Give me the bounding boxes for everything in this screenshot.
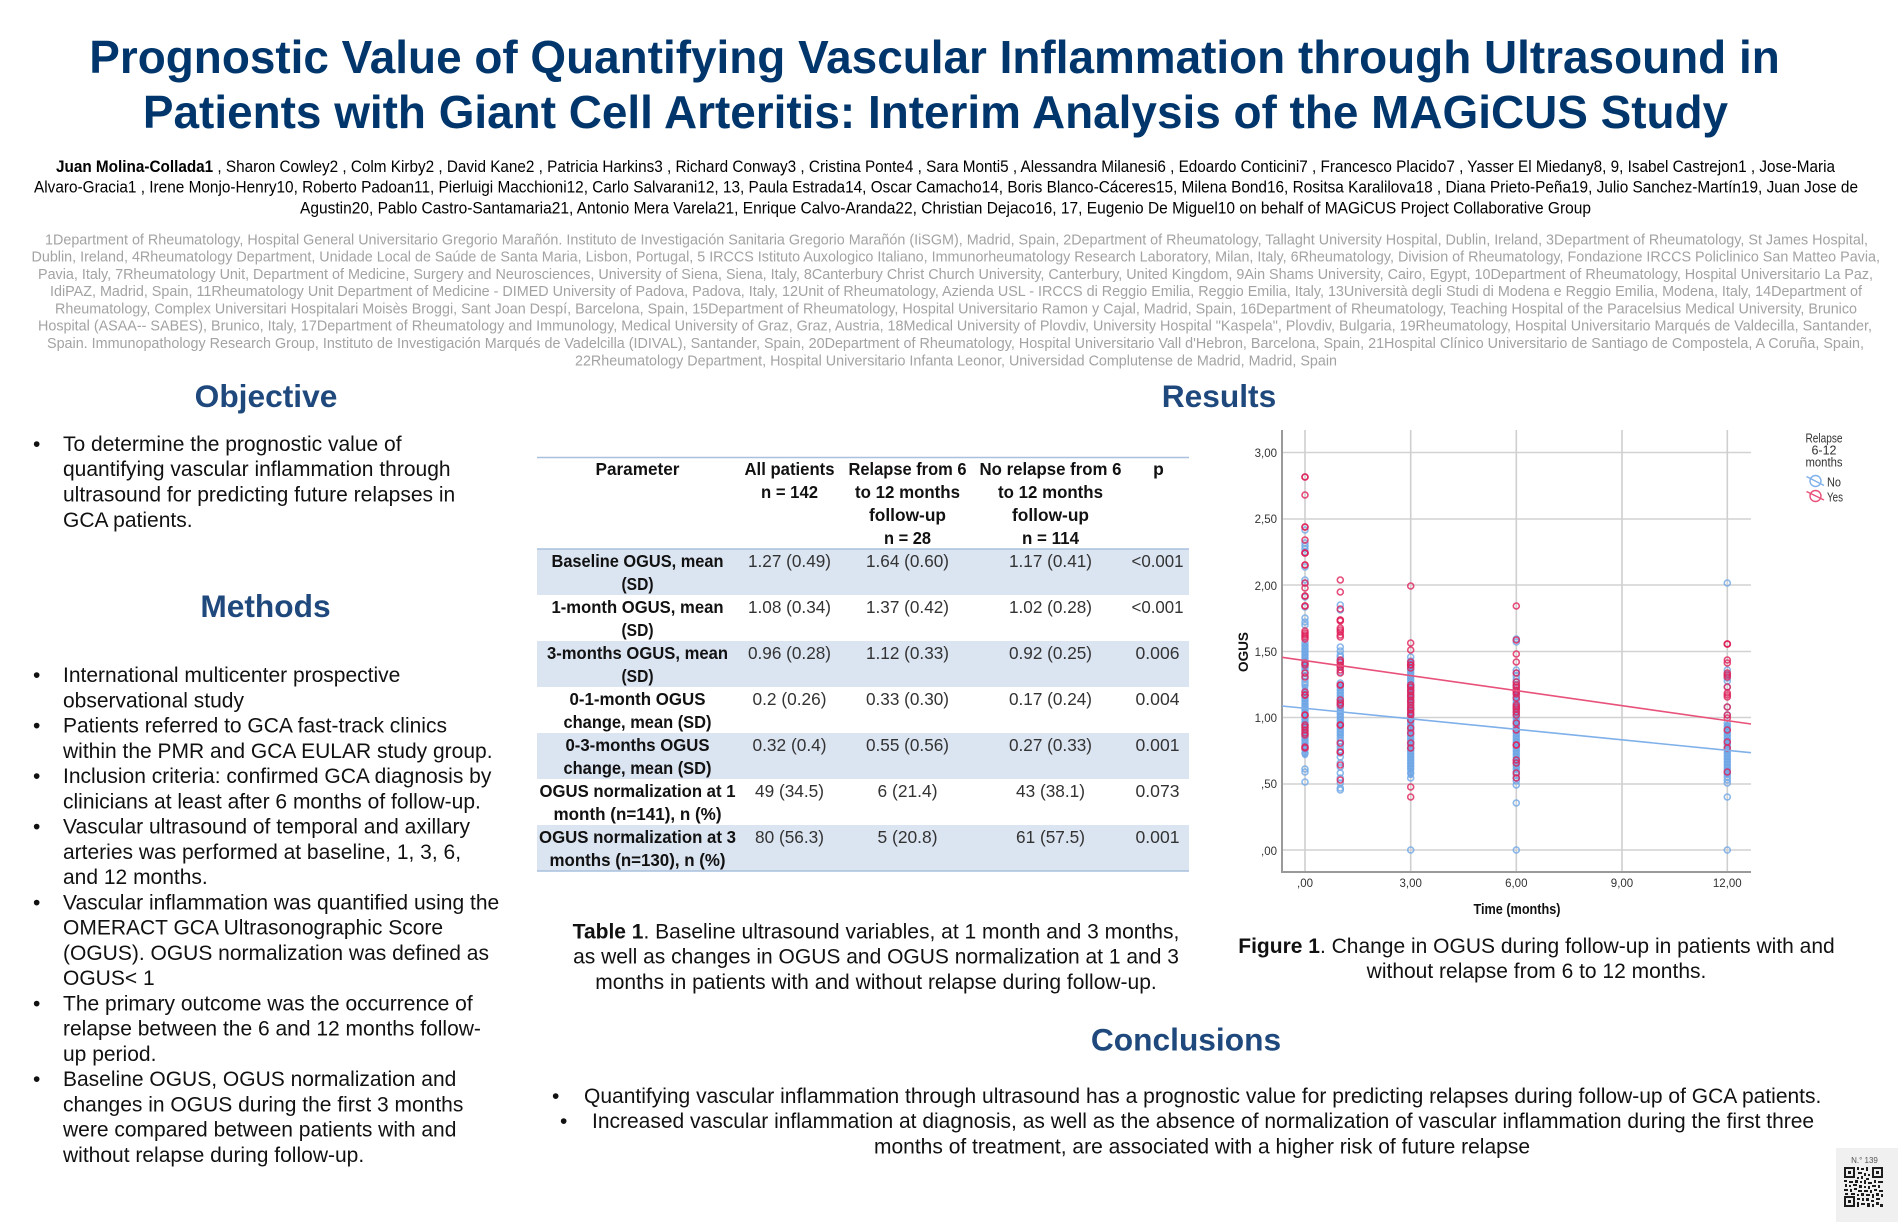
heading: objective: Objective <box>195 378 337 414</box>
panel: methods <box>33 588 499 1167</box>
chart legend: Relapse <box>1806 432 1843 446</box>
x axis tick labels: 3,00 <box>1400 878 1422 890</box>
methods list: • <box>33 714 40 738</box>
affiliations: Hospital (ASAA-- SABES), Brunico, Italy, 17Department of Rheumatology and Immunology, Medical University of Graz, Graz, Austria, 18Medical University of Plovdiv, University Hospital "Kaspela", Plovdiv, Bulgaria, 19Rheumatology, Hospital Universitario Marqués de Valdecilla, Santander, <box>38 318 1872 335</box>
row: baseline OGUS: 1.27 (0.49) <box>748 551 831 571</box>
row: 0-1-month OGUS change: 0.17 (0.24) <box>1009 689 1092 709</box>
row: baseline OGUS: 1.64 (0.60) <box>866 551 949 571</box>
red markers: relapse <box>1305 477 1727 797</box>
row: OGUS normalization 1 month: OGUS normalization at 1 <box>540 781 736 801</box>
row: OGUS normalization 3 months: 61 (57.5) <box>1016 827 1085 847</box>
methods list: Inclusion criteria: confirmed GCA diagnosis by <box>63 765 492 788</box>
table caption: as well as changes in OGUS and OGUS normalization at 1 and 3 <box>573 946 1179 969</box>
objective text: quantifying vascular inflammation through <box>63 458 451 481</box>
row: 0-3-months OGUS change: 0.27 (0.33) <box>1009 735 1092 755</box>
methods list: OGUS< 1 <box>63 967 155 990</box>
methods list: observational study <box>63 689 244 712</box>
objective text: • <box>33 433 40 456</box>
table row shading <box>537 549 1189 871</box>
y axis tick labels: 3,00 <box>1255 448 1277 460</box>
methods list: OMERACT GCA Ultrasonographic Score <box>63 916 443 940</box>
row: 0-1-month OGUS change: 0.33 (0.30) <box>866 689 949 709</box>
table header: to 12 months <box>855 482 960 502</box>
table caption: months in patients with and without relapse during follow-up. <box>595 971 1157 994</box>
row: 1-month OGUS <box>552 597 1184 640</box>
row: 1-month OGUS: <0.001 <box>1132 597 1184 617</box>
table caption: Table 1. Baseline ultrasound variables, at 1 month and 3 months, <box>573 920 1179 944</box>
conclusions list <box>552 1085 1821 1158</box>
row: 1-month OGUS: 1.37 (0.42) <box>866 597 949 617</box>
methods list: without relapse during follow-up. <box>62 1144 364 1167</box>
methods list: International multicenter prospective <box>63 664 400 687</box>
row: OGUS normalization 3 months: 5 (20.8) <box>878 827 938 847</box>
row: 3-months OGUS: 0.92 (0.25) <box>1009 643 1092 663</box>
methods list: changes in OGUS during the first 3 months <box>63 1093 463 1116</box>
x axis tick labels <box>1297 878 1742 890</box>
row: 3-months OGUS: 3-months OGUS, mean <box>547 643 728 663</box>
row: OGUS normalization 3 months: 80 (56.3) <box>755 827 824 847</box>
methods list: • <box>33 1068 40 1091</box>
table 1 <box>537 458 1189 871</box>
row: OGUS normalization 3 months <box>539 827 1180 870</box>
row: OGUS normalization 3 months: OGUS normalization at 3 <box>539 827 736 847</box>
title <box>89 31 1780 138</box>
y axis tick labels: 2,50 <box>1255 514 1277 526</box>
methods list: Vascular ultrasound of temporal and axillary <box>63 816 470 838</box>
conclusions list: • <box>552 1085 559 1108</box>
y axis title: OGUS <box>1235 632 1251 672</box>
methods list: The primary outcome was the occurrence of <box>63 992 473 1015</box>
methods list: • <box>33 765 40 788</box>
methods list: and 12 months. <box>63 866 208 889</box>
chart legend: months <box>1806 456 1842 470</box>
chart axes <box>1282 430 1751 872</box>
methods list: Baseline OGUS, OGUS normalization and <box>63 1068 456 1091</box>
row: 1-month OGUS: 1-month OGUS, mean <box>552 597 724 617</box>
row: OGUS normalization 3 months: 0.001 <box>1136 827 1180 847</box>
table header <box>596 459 1164 548</box>
affiliations <box>32 232 1880 369</box>
conclusions list: • <box>560 1110 567 1133</box>
QR code badge: N.° 139 <box>1851 1156 1878 1165</box>
chart legend <box>1806 432 1843 504</box>
methods list: (OGUS). OGUS normalization was defined as <box>63 942 489 965</box>
methods list: arteries was performed at baseline, 1, 3, 6, <box>63 841 461 864</box>
heading: methods: Methods <box>200 588 331 624</box>
table header: Parameter <box>596 459 680 479</box>
row: 0-3-months OGUS change: change, mean (SD) <box>564 758 712 778</box>
table header: Relapse from 6 <box>848 459 967 479</box>
table header: n = 142 <box>761 482 818 502</box>
y axis tick labels: 2,00 <box>1255 581 1277 593</box>
row: OGUS normalization 1 month <box>540 781 1180 824</box>
methods list <box>33 664 499 1167</box>
y axis tick labels: ,50 <box>1261 779 1277 791</box>
row: baseline OGUS: <0.001 <box>1132 551 1184 571</box>
table header: n = 114 <box>1022 528 1079 548</box>
heading: conclusions: Conclusions <box>1091 1022 1281 1058</box>
row: baseline OGUS: (SD) <box>622 574 654 594</box>
chart grid <box>1282 430 1751 872</box>
y axis tick labels <box>1255 448 1277 858</box>
row: 3-months OGUS <box>547 643 1180 686</box>
legend item: yes: Yes <box>1827 490 1843 504</box>
row: 0-1-month OGUS change <box>564 689 1180 732</box>
conclusions list: Quantifying vascular inflammation through ultrasound has a prognostic value for predicting relapses during follow-up of GCA patients. <box>584 1085 1821 1108</box>
y axis tick labels: ,00 <box>1261 846 1277 858</box>
row: 3-months OGUS: 1.12 (0.33) <box>866 643 949 663</box>
panel: conclusions <box>552 1022 1821 1158</box>
row: OGUS normalization 1 month: 43 (38.1) <box>1016 781 1085 801</box>
row: OGUS normalization 1 month: 0.073 <box>1136 781 1180 801</box>
scatter chart: OGUS during follow-up <box>1235 430 1843 918</box>
heading: results: Results <box>1162 378 1276 414</box>
methods list: up period. <box>63 1043 156 1066</box>
legend item: no: No <box>1827 476 1841 490</box>
row: 0-3-months OGUS change: 0.55 (0.56) <box>866 735 949 755</box>
title: Prognostic Value of Quantifying Vascular Inflammation through Ultrasound in <box>89 31 1780 83</box>
row: OGUS normalization 1 month: 6 (21.4) <box>878 781 938 801</box>
fit line: relapse <box>1282 657 1751 724</box>
row: 0-3-months OGUS change: 0.32 (0.4) <box>752 735 826 755</box>
table header: to 12 months <box>998 482 1103 502</box>
objective text <box>33 433 455 532</box>
icon: QR code <box>1844 1167 1883 1207</box>
affiliations: 1Department of Rheumatology, Hospital General Universitario Gregorio Marañón. Instituto de Investigación Sanitaria Gregorio Marañón (IiSGM), Madrid, Spain, 2Department of Rheumatology, Tallaght University Hospital, Dublin, Ireland, 3Department of Rheumatology, St James Hospital, <box>45 232 1868 248</box>
row: 3-months OGUS: 0.96 (0.28) <box>748 643 831 663</box>
table header: All patients <box>744 459 835 479</box>
methods list: • <box>33 664 40 687</box>
x axis tick labels: 9,00 <box>1611 878 1633 890</box>
methods list: clinicians at least after 6 months of follow-up. <box>63 790 481 813</box>
affiliations: Pavia, Italy, 7Rheumatology Unit, Department of Medicine, Surgery and Neurosciences, University of Siena, Siena, Italy, 8Canterbury Christ Church University, Canterbury, United Kingdom, 9Ain Shams University, Cairo, Egypt, 10Department of Rheumatology, Hospital Universitario La Paz, <box>38 266 1873 283</box>
objective text: GCA patients. <box>63 509 193 532</box>
row: 0-3-months OGUS change <box>564 735 1180 778</box>
row: baseline OGUS: Baseline OGUS, mean <box>552 551 724 571</box>
conclusions list: Increased vascular inflammation at diagnosis, as well as the absence of normalization of vascular inflammation during the first three <box>592 1110 1814 1133</box>
table caption <box>573 920 1179 994</box>
table header: follow-up <box>1012 505 1089 525</box>
table header: follow-up <box>869 505 946 525</box>
row: 0-1-month OGUS change: change, mean (SD) <box>564 712 712 732</box>
methods list: • <box>33 992 40 1015</box>
methods list: Patients referred to GCA fast-track clinics <box>63 714 447 738</box>
y axis tick labels: 1,00 <box>1255 713 1277 725</box>
chart legend: 6-12 <box>1811 444 1837 458</box>
row: 0-1-month OGUS change: 0.2 (0.26) <box>752 689 826 709</box>
row: 0-3-months OGUS change: 0.001 <box>1136 735 1180 755</box>
row: 0-1-month OGUS change: 0.004 <box>1136 689 1180 709</box>
table header: No relapse from 6 <box>980 459 1122 479</box>
figure caption: Figure 1. Change in OGUS during follow-up in patients with and <box>1238 935 1835 958</box>
conclusions list: months of treatment, are associated with a higher risk of future relapse <box>874 1135 1530 1158</box>
affiliations: Spain. Immunopathology Research Group, Instituto de Investigación Marqués de Vadelcilla (IDIVAL), Santander, Spain, 20Department of Rheumatology, Hospital Universitario Vall d'Hebron, Barcelona, Spain, 21Hospital Clínico Universitario de Santiago de Compostela, A Coruña, Spain, <box>47 335 1864 352</box>
row: baseline OGUS: 1.17 (0.41) <box>1009 551 1092 571</box>
authors: Agustin20, Pablo Castro-Santamaria21, Antonio Mera Varela21, Enrique Calvo-Aranda22, Christian Dejaco16, 17, Eugenio De Miguel10 on behalf of MAGiCUS Project Collaborative Group <box>300 198 1591 217</box>
methods list: relapse between the 6 and 12 months follow- <box>63 1018 481 1040</box>
methods list: • <box>33 816 40 838</box>
row: 3-months OGUS: (SD) <box>622 666 654 686</box>
affiliations: IdiPAZ, Madrid, Spain, 11Rheumatology Unit Department of Medicine - DIMED University of Padova, Padova, Italy, 12Unit of Rheumatology, Azienda USL - IRCCS di Reggio Emilia, Reggio Emilia, Italy, 13Università degli Studi di Modena e Reggio Emilia, Modena, Italy, 14Department of <box>50 283 1863 300</box>
affiliations: Rheumatology, Complex Universitari Hospitalari Moisès Broggi, Sant Joan Despí, Barcelona, Spain, 15Department of Rheumatology, Hospital Universitario Ramon y Cajal, Madrid, Spain, 16Department of Rheumatology, Teaching Hospital of the Paracelsius Medical University, Brunico <box>55 300 1857 318</box>
row: 3-months OGUS: 0.006 <box>1136 643 1180 663</box>
row: baseline OGUS <box>552 551 1184 594</box>
methods list: Vascular inflammation was quantified using the <box>63 891 499 914</box>
objective text: ultrasound for predicting future relapses in <box>63 484 455 506</box>
methods list: within the PMR and GCA EULAR study group. <box>62 740 493 763</box>
panel: objective <box>33 378 455 532</box>
row: 1-month OGUS: 1.08 (0.34) <box>748 597 831 617</box>
row: OGUS normalization 1 month: 49 (34.5) <box>755 781 824 801</box>
title: Patients with Giant Cell Arteritis: Interim Analysis of the MAGiCUS Study <box>143 86 1729 138</box>
y axis tick labels: 1,50 <box>1255 647 1277 659</box>
fit line: no relapse <box>1282 706 1751 753</box>
figure caption: without relapse from 6 to 12 months. <box>1366 960 1706 983</box>
authors <box>34 157 1858 217</box>
x axis tick labels: 12,00 <box>1713 878 1742 890</box>
objective text: To determine the prognostic value of <box>63 433 402 456</box>
row: OGUS normalization 1 month: month (n=141), n (%) <box>554 804 722 824</box>
row: 1-month OGUS: 1.02 (0.28) <box>1009 597 1092 617</box>
QR code badge <box>1836 1148 1898 1222</box>
blue markers: no relapse <box>1305 530 1727 850</box>
figure caption <box>1238 935 1835 983</box>
x axis tick labels: ,00 <box>1297 878 1313 890</box>
row: 0-3-months OGUS change: 0-3-months OGUS <box>566 735 710 755</box>
x axis title: Time (months) <box>1474 901 1561 918</box>
table rules <box>537 458 1189 871</box>
methods list: • <box>33 891 40 914</box>
row: 1-month OGUS: (SD) <box>622 620 654 640</box>
table header: p <box>1153 459 1164 479</box>
x axis tick labels: 6,00 <box>1505 878 1527 890</box>
table header: n = 28 <box>884 528 931 548</box>
row: OGUS normalization 3 months: months (n=130), n (%) <box>550 850 726 870</box>
methods list: were compared between patients with and <box>62 1118 456 1142</box>
affiliations: 22Rheumatology Department, Hospital Universitario Infanta Leonor, Universidad Complutense de Madrid, Madrid, Spain <box>575 352 1337 369</box>
row: 0-1-month OGUS change: 0-1-month OGUS <box>570 689 706 709</box>
